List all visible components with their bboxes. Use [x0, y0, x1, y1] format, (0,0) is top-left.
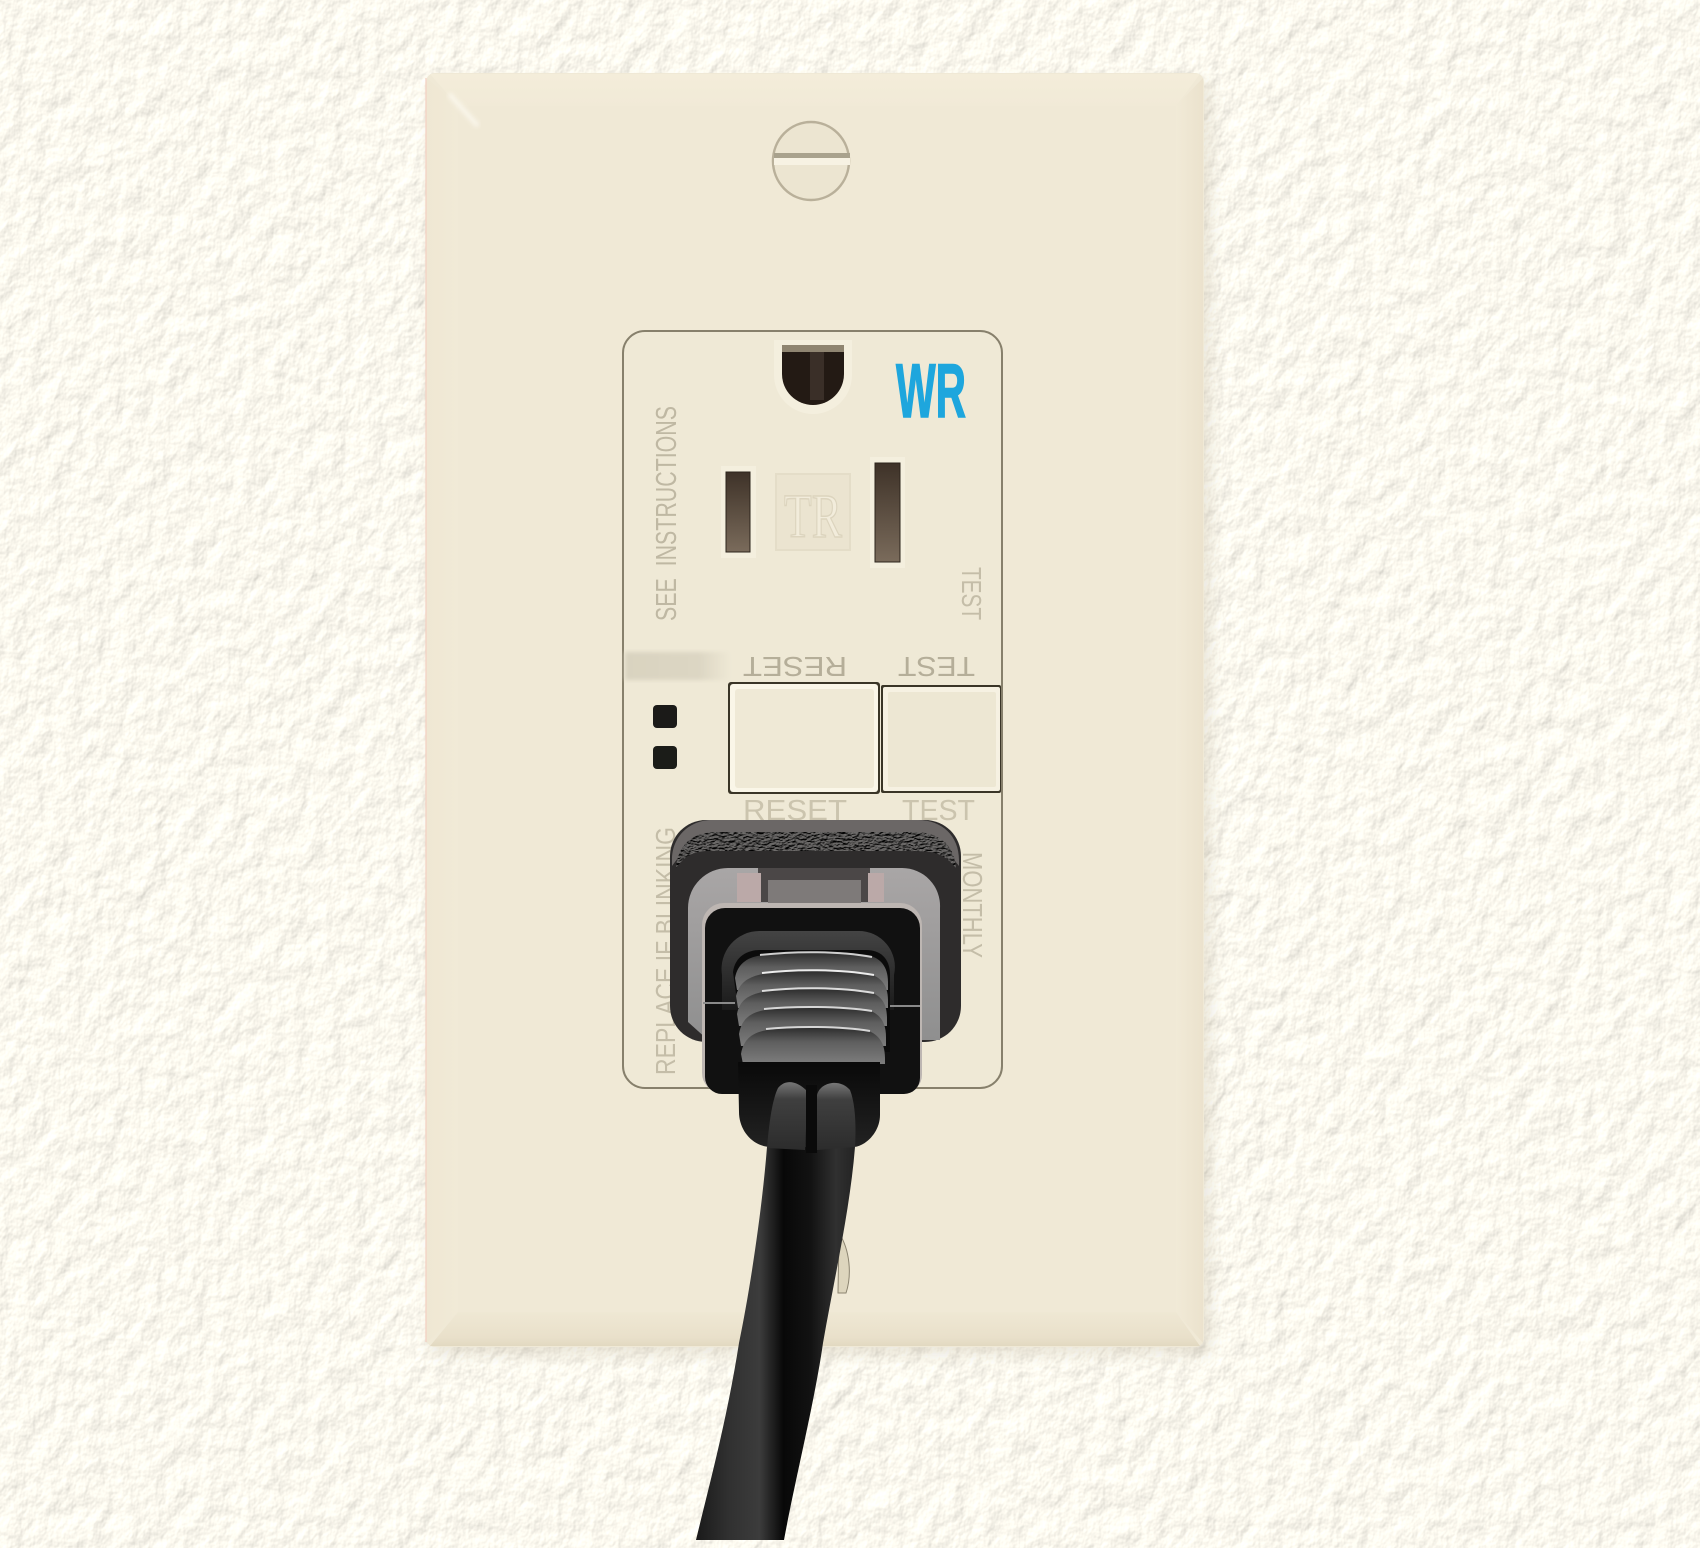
- upside-down reset label: RESET: [743, 651, 847, 682]
- outlet face: [623, 331, 1002, 1088]
- label: replace if blinking: REPLACE IF BLINKING: [650, 827, 681, 1075]
- indicator lights: [653, 705, 677, 769]
- ground hole: [774, 340, 852, 414]
- label: see instructions: SEE INSTRUCTIONS: [651, 406, 683, 621]
- shaded band above buttons: [625, 652, 730, 680]
- strain relief ribs: [733, 950, 890, 1064]
- label: monthly: MONTHLY: [957, 852, 988, 958]
- reset label: RESET: [743, 795, 847, 827]
- reset button: [728, 682, 880, 794]
- WR mark: WR: [896, 349, 966, 434]
- plug body: [702, 903, 922, 1094]
- neutral slot: [721, 466, 756, 558]
- cord top lobes: [767, 1082, 855, 1153]
- wall plate: [425, 73, 1204, 1347]
- plate shadow on wall: [430, 82, 1212, 1356]
- test label: TEST: [902, 795, 975, 827]
- screw bottom, behind cord: [838, 1233, 849, 1293]
- test button: [881, 685, 1001, 793]
- label: test vertical: TEST: [956, 567, 987, 620]
- upside-down test label: TEST: [898, 651, 975, 682]
- screw: [773, 122, 850, 200]
- TR emblem: [776, 474, 850, 551]
- TR emblem: TR: [784, 483, 842, 551]
- plug faceplate: [670, 820, 961, 1042]
- plug neck: [738, 1062, 880, 1147]
- cord: [696, 1147, 855, 1540]
- hot slot: [870, 457, 905, 568]
